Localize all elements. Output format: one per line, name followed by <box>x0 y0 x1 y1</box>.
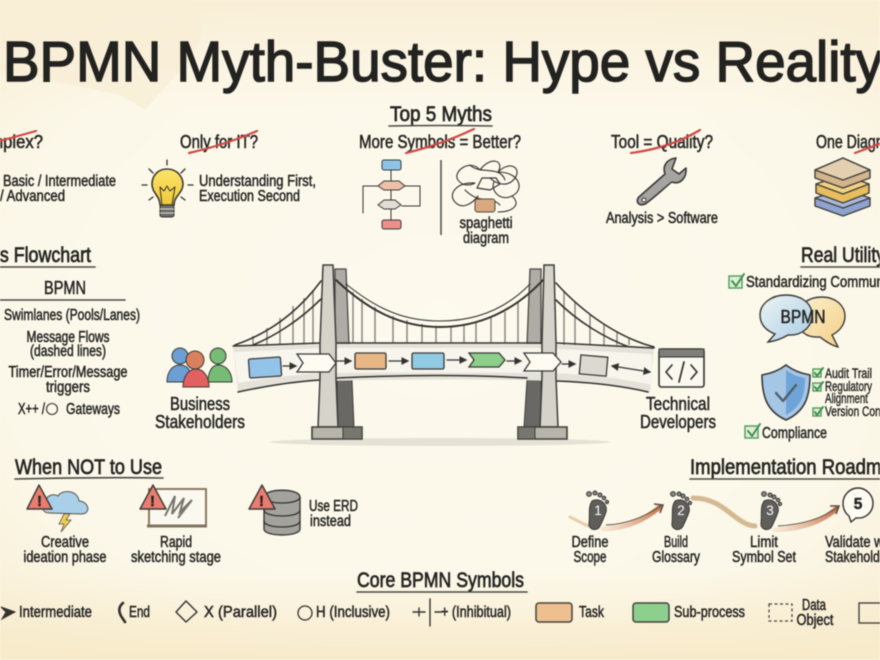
myth: more symbols: diagram <box>463 230 509 247</box>
symbol: third gateway <box>413 599 511 626</box>
step: define scope <box>572 491 609 566</box>
heading: when not to use: When NOT to Use <box>15 456 162 479</box>
step: define scope: Define <box>572 534 608 551</box>
myth: complex <box>0 131 116 205</box>
step: limit symbol set <box>732 492 797 566</box>
myth: more symbols: spaghetti <box>460 215 512 232</box>
column: BPMN: triggers <box>46 379 90 396</box>
symbol: parallel gateway <box>176 601 277 622</box>
myth: complex: / Advanced <box>0 188 65 205</box>
ground shading <box>270 438 610 446</box>
panel: when not to use <box>15 456 358 566</box>
item: use ERD instead: ! <box>259 493 264 510</box>
item: use ERD instead: instead <box>310 513 351 530</box>
label: business stakeholders: Business <box>170 394 230 414</box>
myth: more symbols <box>359 129 521 247</box>
step: define scope: Scope <box>574 549 606 566</box>
footings <box>312 427 567 439</box>
label: technical developers: Technical <box>646 394 710 414</box>
column: BPMN <box>0 278 140 418</box>
column: BPMN: Message Flows <box>26 329 110 346</box>
step: validate with stakeholders: 5 <box>854 496 863 513</box>
heading: top 5 myths: Top 5 Myths <box>390 103 492 126</box>
column: BPMN: Gateways <box>66 401 120 418</box>
icon: wrench <box>637 158 686 205</box>
myth: one diagram <box>815 132 880 216</box>
step: limit symbol set: Limit <box>750 534 779 551</box>
symbol: sub-process <box>633 603 745 622</box>
item: rapid sketching: Rapid <box>160 534 192 551</box>
flow on the bridge deck <box>248 353 650 378</box>
myth: tool equals quality: Analysis > Software <box>606 210 718 227</box>
item: use ERD instead <box>249 485 358 535</box>
column: BPMN: (dashed lines) <box>30 343 106 360</box>
symbol: end: End <box>129 604 150 621</box>
panel: top 5 myths <box>0 103 880 247</box>
cables <box>346 284 530 321</box>
step: build glossary: Build <box>664 534 688 551</box>
item: creative ideation: ideation phase <box>24 549 106 566</box>
icon: code window <box>659 349 704 387</box>
column: BPMN: Swimlanes (Pools/Lanes) <box>4 307 140 324</box>
label: business stakeholders: Stakeholders <box>155 412 245 432</box>
item: rapid sketching: sketching stage <box>131 549 221 566</box>
item: compliance <box>745 424 827 442</box>
panel: core BPMN symbols <box>1 569 880 629</box>
myth: tool equals quality <box>606 130 718 227</box>
step: limit symbol set: 3 <box>766 503 774 518</box>
symbol: intermediate: Intermediate <box>19 604 92 621</box>
panel: real utility <box>729 244 880 442</box>
road arrows <box>570 498 839 530</box>
step: validate with stakeholders <box>825 488 880 566</box>
symbol: third gateway: + (Inhibitual) <box>441 604 511 621</box>
myth: only for IT <box>142 131 316 217</box>
item: creative ideation <box>24 485 106 566</box>
column: BPMN: X++ / <box>18 401 45 418</box>
symbol: inclusive gateway: H (Inclusive) <box>316 604 390 621</box>
symbol: task: Task <box>579 604 604 621</box>
myth: complex: Basic / Intermediate <box>3 173 116 190</box>
list: compliance items <box>813 366 880 419</box>
icon: shield <box>762 365 810 420</box>
label: technical developers <box>640 394 716 432</box>
label: technical developers: Developers <box>640 412 716 432</box>
label: business stakeholders <box>155 394 245 432</box>
icon: layered stack <box>815 158 870 216</box>
symbol: data object: Data <box>802 597 826 614</box>
symbol: sub-process: Sub-process <box>674 604 745 621</box>
step: build glossary: 2 <box>677 503 685 518</box>
heading: core BPMN symbols: Core BPMN Symbols <box>357 569 524 592</box>
icon: bridge <box>233 265 654 446</box>
item: use ERD instead: Use ERD <box>309 498 358 515</box>
symbol: data object: Object <box>796 612 834 629</box>
item: rapid sketching: ! <box>150 493 155 510</box>
symbol: data object <box>769 597 834 629</box>
column: BPMN: BPMN <box>44 278 86 298</box>
panel: implementation roadmap <box>570 456 880 566</box>
step: define scope: 1 <box>594 503 602 518</box>
step: build glossary <box>652 492 700 566</box>
icon: light bulb <box>142 160 193 217</box>
myth: tool equals quality: Tool = Quality? <box>611 132 713 152</box>
myth: only for IT: Only for IT? <box>180 132 258 152</box>
step: build glossary: Glossary <box>652 549 700 566</box>
symbol: end <box>119 603 150 622</box>
back towers <box>335 269 541 345</box>
icon: small flowchart <box>363 160 420 229</box>
icon: business stakeholders <box>167 348 232 387</box>
myth: more symbols: More Symbols = Better? <box>359 132 521 152</box>
deck <box>233 344 654 393</box>
symbol: annotation box <box>859 603 880 623</box>
item: compliance: Compliance <box>762 425 827 442</box>
myth: only for IT: Understanding First, <box>199 173 316 190</box>
symbol: parallel gateway: X (Parallel) <box>204 604 277 621</box>
item: rapid sketching <box>131 485 221 566</box>
hangers <box>253 290 629 345</box>
item: creative ideation: Creative <box>41 534 89 551</box>
front towers <box>318 265 338 427</box>
panel: bridge between business and technical <box>155 265 716 446</box>
step: limit symbol set: Symbol Set <box>732 549 797 566</box>
myth: only for IT: Execution Second <box>199 188 300 205</box>
icon: spaghetti diagram <box>452 161 519 212</box>
icon: BPMN speech bubbles: BPMN <box>780 307 826 327</box>
icon: BPMN speech bubbles <box>760 295 845 347</box>
panel: BPMN vs flowchart <box>0 244 140 418</box>
item: creative ideation: ! <box>37 493 42 510</box>
symbol: task <box>536 603 604 622</box>
column: BPMN: Timer/Error/Message <box>8 364 127 381</box>
